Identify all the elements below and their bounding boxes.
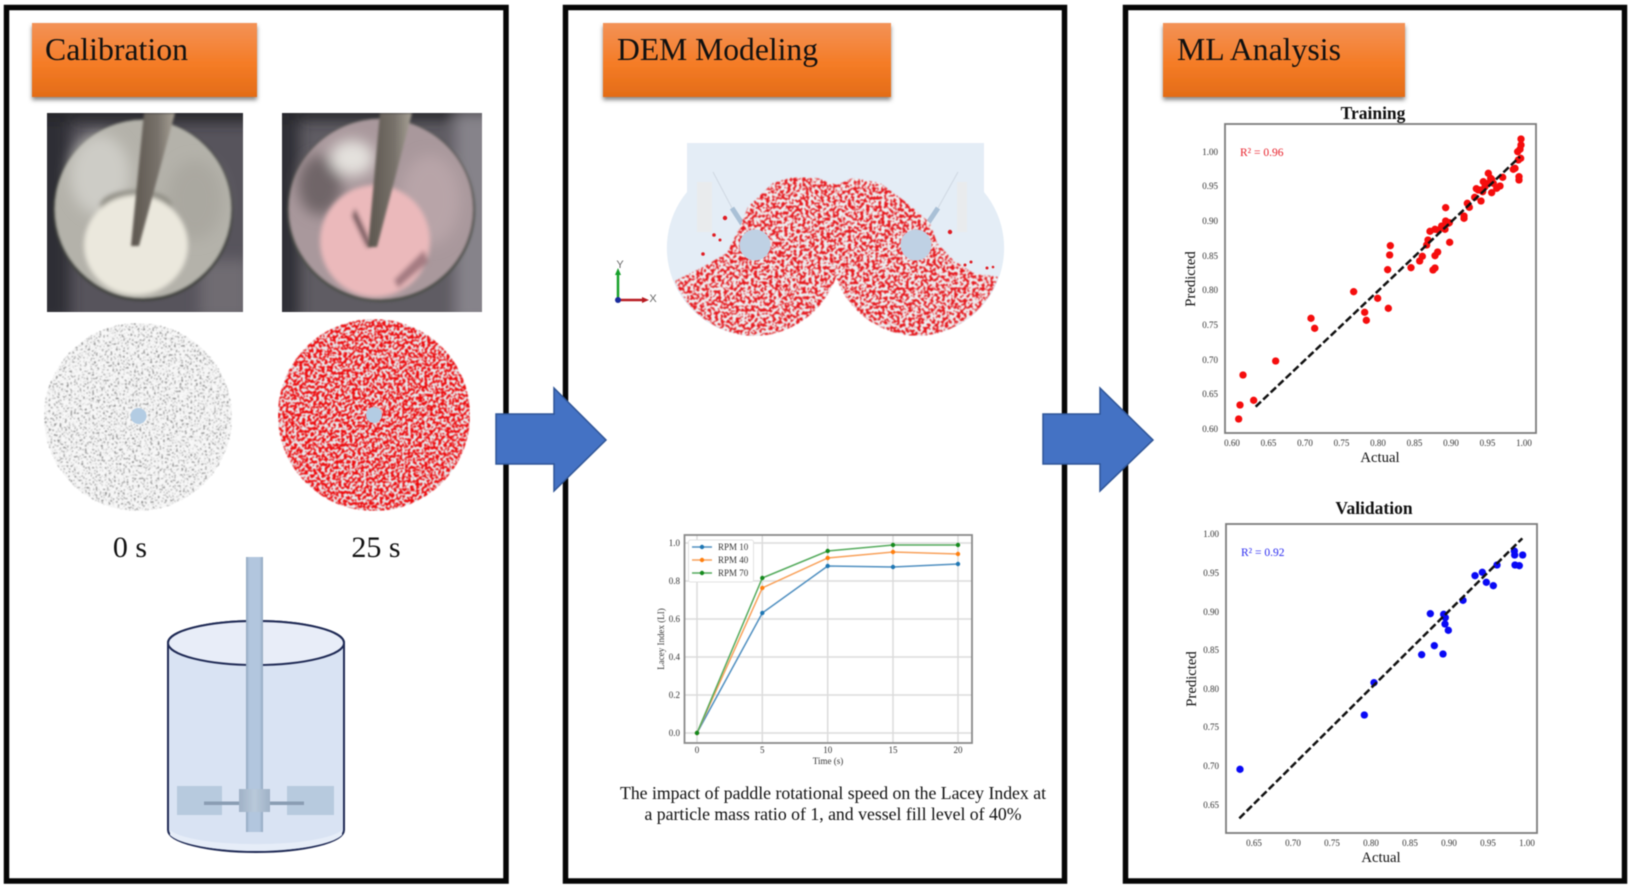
chart: training scatter: 0.60	[1202, 424, 1218, 434]
chart: training scatter: R² = 0.96	[1240, 147, 1284, 159]
chart: training scatter: 0.65	[1202, 389, 1218, 399]
chart: training scatter: 0.75	[1334, 438, 1350, 448]
chart: validation scatter: 1.00	[1519, 838, 1535, 848]
chart: validation scatter: 0.85	[1203, 645, 1220, 655]
line chart: Lacey Index over time: 0.2	[669, 690, 680, 700]
chart: training scatter: 0.65	[1261, 438, 1277, 448]
chart: training scatter: 0.95	[1480, 438, 1496, 448]
line chart: Lacey Index over time: 0	[695, 745, 700, 755]
chart: training scatter: Predicted	[1183, 251, 1199, 307]
title: Validation: Validation	[1335, 498, 1413, 518]
line chart: Lacey Index over time: 20	[954, 745, 963, 755]
icon: XY axes triad: Y	[616, 259, 624, 271]
title: Training: Training	[1341, 103, 1406, 123]
schematic: stirred vessel	[168, 557, 344, 852]
chart: validation scatter: 0.65	[1246, 838, 1262, 848]
chart: validation scatter: 0.90	[1441, 838, 1457, 848]
line chart: Lacey Index over time: 0.4	[669, 652, 680, 662]
chart: validation scatter: Predicted	[1184, 651, 1200, 707]
chart: validation scatter: 0.65	[1203, 800, 1220, 810]
chart: training scatter: 0.75	[1202, 320, 1218, 330]
line chart: Lacey Index over time: 10	[823, 745, 833, 755]
chart: training scatter: 0.60	[1224, 438, 1240, 448]
line chart: Lacey Index over time: 0.8	[669, 576, 680, 586]
points: validation	[1236, 547, 1526, 773]
label: 25 s: 25 s	[351, 531, 401, 564]
points: training	[1235, 135, 1525, 423]
chart: training scatter: 0.90	[1202, 216, 1218, 226]
label: 0 s: 0 s	[113, 531, 147, 564]
chart: training scatter: 0.80	[1202, 285, 1218, 295]
photo: powder before mixing	[46, 112, 244, 313]
caption	[620, 783, 1046, 824]
heading: ML Analysis: ML Analysis	[1177, 31, 1341, 67]
caption: a particle mass ratio of 1, and vessel fill level of 40%	[644, 804, 1022, 824]
series: RPM 10	[695, 562, 960, 735]
heading: ML Analysis	[1163, 23, 1405, 97]
series: RPM 40	[695, 550, 960, 735]
line chart: Lacey Index over time	[656, 535, 972, 766]
chart: training scatter	[1183, 103, 1536, 466]
chart: training scatter: 1.00	[1516, 438, 1532, 448]
legend: RPM 10	[718, 542, 749, 552]
chart: training scatter: 0.80	[1370, 438, 1386, 448]
legend	[688, 540, 754, 582]
line chart: Lacey Index over time: 0.0	[669, 728, 680, 738]
chart: training scatter: 0.85	[1202, 251, 1218, 261]
chart: validation scatter: 0.70	[1285, 838, 1301, 848]
fit line: validation	[1239, 538, 1522, 818]
chart: validation scatter: 0.85	[1402, 838, 1418, 848]
chart: validation scatter: 0.95	[1480, 838, 1496, 848]
legend: RPM 70	[718, 568, 749, 578]
chart: validation scatter: 0.80	[1203, 684, 1220, 694]
chart: training scatter: 1.00	[1202, 147, 1218, 157]
heading: DEM Modeling	[603, 23, 891, 97]
heading: Calibration: Calibration	[45, 31, 188, 67]
chart: training scatter: 0.85	[1407, 438, 1423, 448]
caption: The impact of paddle rotational speed on the Lacey Index at	[620, 783, 1046, 803]
line chart: Lacey Index over time: 15	[888, 745, 898, 755]
chart: validation scatter: 0.75	[1324, 838, 1340, 848]
line chart: Lacey Index over time: Time (s)	[813, 756, 843, 766]
arrow: calibration to DEM modeling	[496, 388, 606, 491]
simulation: twin paddle mixer cross-section	[667, 143, 1004, 336]
icon: XY axes triad: X	[649, 293, 657, 305]
heading: DEM Modeling: DEM Modeling	[617, 31, 818, 67]
chart: validation scatter: 0.75	[1203, 722, 1220, 732]
arrow: DEM modeling to ML analysis	[1043, 388, 1153, 491]
icon: XY axes triad	[615, 259, 657, 305]
photo: powder after mixing	[281, 112, 483, 313]
chart: validation scatter: Actual	[1361, 850, 1401, 866]
chart: training scatter: 0.90	[1443, 438, 1459, 448]
chart: validation scatter: R² = 0.92	[1241, 547, 1285, 559]
chart: validation scatter: 1.00	[1203, 529, 1220, 539]
line chart: Lacey Index over time: 5	[760, 745, 765, 755]
legend: RPM 40	[718, 555, 749, 565]
chart: training scatter: 0.70	[1297, 438, 1313, 448]
line chart: Lacey Index over time: 1.0	[669, 538, 680, 548]
chart: validation scatter: 0.95	[1203, 568, 1220, 578]
chart: training scatter: Actual	[1360, 450, 1400, 466]
simulation disc: 0 s	[44, 323, 232, 511]
heading: Calibration	[32, 23, 257, 97]
series: RPM 70	[695, 543, 960, 735]
chart: training scatter: 0.95	[1202, 181, 1218, 191]
chart: validation scatter: 0.80	[1363, 838, 1379, 848]
chart: validation scatter: 0.90	[1203, 607, 1220, 617]
chart: validation scatter	[1184, 498, 1537, 866]
chart: training scatter: 0.70	[1202, 355, 1218, 365]
panel: ML analysis	[1126, 8, 1624, 881]
panel: DEM modeling	[566, 8, 1064, 881]
line chart: Lacey Index over time: Lacey Index (LI)	[656, 608, 666, 670]
line chart: Lacey Index over time: 0.6	[669, 614, 680, 624]
simulation disc: 25 s	[278, 319, 470, 511]
fit line: training	[1256, 157, 1520, 407]
chart: validation scatter: 0.70	[1203, 761, 1220, 771]
panel: calibration	[6, 8, 506, 881]
